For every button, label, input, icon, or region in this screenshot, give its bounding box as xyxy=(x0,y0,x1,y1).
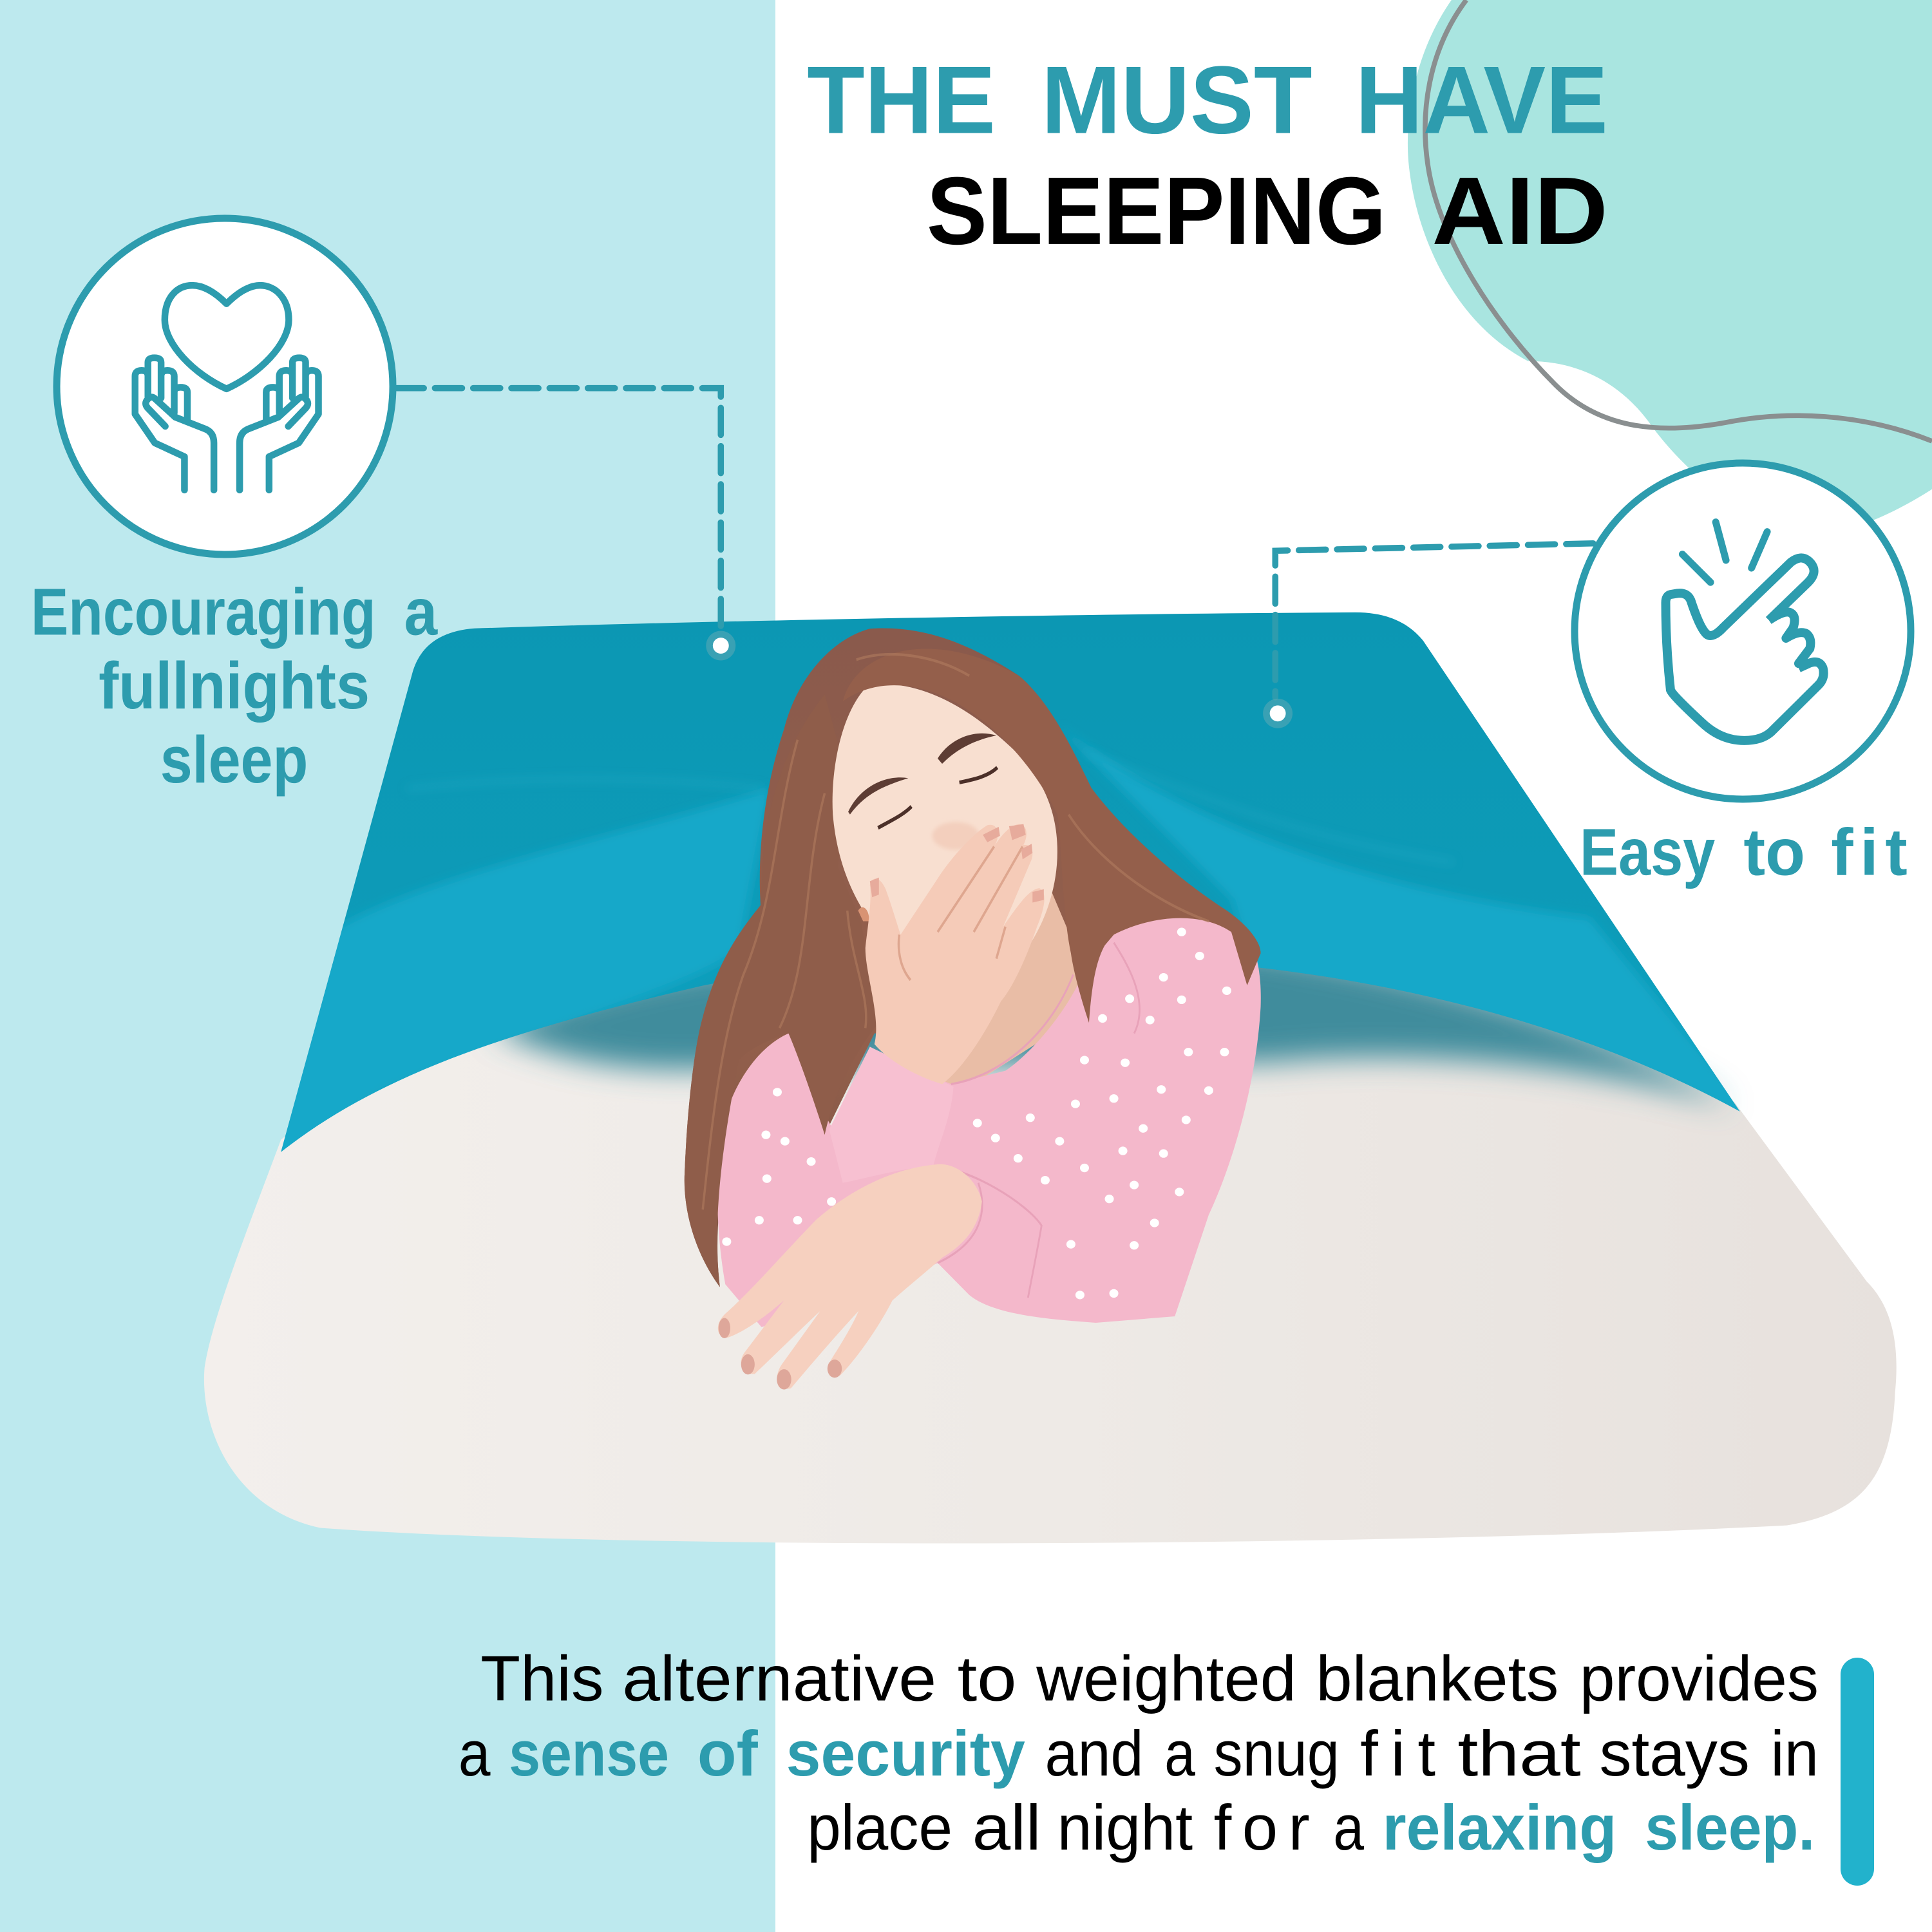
label: easy to fit xyxy=(1580,814,1908,889)
connector: left dashed line with dot xyxy=(397,388,735,661)
connector: right dashed line with dot xyxy=(1263,544,1593,728)
text block: description: alternative xyxy=(622,1643,936,1714)
hair strands xyxy=(703,654,1209,1209)
panel: left light blue background xyxy=(0,0,775,1932)
finger creases xyxy=(898,846,1023,980)
text block: description xyxy=(459,1643,1819,1864)
label: easy to fit: Easy xyxy=(1580,814,1715,889)
sheet folds xyxy=(265,727,1762,1171)
label: easy to fit: fit xyxy=(1831,814,1908,889)
label: encouraging a fullnights sleep: fullnights xyxy=(99,648,370,723)
text block: description: a xyxy=(1164,1718,1195,1790)
fingernail 3 xyxy=(777,1369,791,1390)
title: SLEEPING xyxy=(927,157,1386,265)
text block: description: This xyxy=(480,1643,604,1714)
title: MUST xyxy=(1041,46,1312,154)
text block: description: provides xyxy=(1580,1643,1819,1714)
label: encouraging a fullnights sleep: Encouraging xyxy=(31,574,376,649)
decorative blob: top right xyxy=(1408,0,1932,533)
text block: description: for xyxy=(1214,1792,1310,1864)
text block: description: in xyxy=(1770,1718,1819,1790)
title: HAVE xyxy=(1356,46,1608,154)
icon: finger snap xyxy=(1575,463,1911,799)
text block: description: all xyxy=(972,1792,1041,1864)
title: AID xyxy=(1432,157,1608,265)
decorative curve: grey line xyxy=(1425,0,1932,441)
accent bar xyxy=(1841,1658,1874,1886)
text block: description: and xyxy=(1045,1718,1144,1790)
text block: description: that xyxy=(1457,1718,1581,1790)
fingernail 1 xyxy=(719,1318,730,1338)
mattress with fitted sheet xyxy=(204,612,1897,1543)
label: encouraging a fullnights sleep: sleep xyxy=(160,722,308,797)
nose xyxy=(933,822,980,849)
closed eyes xyxy=(878,768,998,828)
label: encouraging a fullnights sleep xyxy=(31,574,439,797)
sleeve and seams xyxy=(829,1046,954,1183)
pink pyjama top xyxy=(717,914,1261,1327)
fingernail 4 xyxy=(828,1359,842,1378)
mouth covering hand xyxy=(866,824,1045,1084)
hair back xyxy=(685,629,1261,1287)
mattress body xyxy=(204,945,1897,1543)
neck xyxy=(888,889,1084,1092)
hair left over shoulder xyxy=(685,694,879,1287)
text block: description: snug xyxy=(1214,1718,1340,1790)
text block: description: a xyxy=(459,1718,491,1790)
text block: description: security xyxy=(786,1718,1025,1790)
text block: description: night xyxy=(1057,1792,1193,1864)
title: THE xyxy=(807,46,996,154)
face xyxy=(833,683,1057,1007)
label: encouraging a fullnights sleep: a xyxy=(404,574,439,649)
text block: description: relaxing xyxy=(1383,1792,1616,1864)
white heart pattern on top xyxy=(722,928,1231,1299)
text block: description: weighted xyxy=(1036,1643,1296,1714)
text block: description: place xyxy=(807,1792,952,1864)
shadow below sheet xyxy=(493,949,1731,1106)
text block: description: sense xyxy=(509,1718,669,1790)
fingernails xyxy=(870,824,1044,903)
eyebrows xyxy=(848,734,996,815)
ear xyxy=(858,907,869,922)
text block: description: to xyxy=(958,1643,1016,1714)
fingernail 2 xyxy=(741,1354,755,1374)
lower hand on mattress xyxy=(718,1164,982,1388)
sheet xyxy=(281,612,1740,1152)
hair right side xyxy=(843,649,1261,1023)
text block: description: stays xyxy=(1599,1718,1750,1790)
icon: heart held by hands xyxy=(57,218,393,554)
photo: yawning woman xyxy=(685,629,1261,1390)
text block: description: of xyxy=(697,1718,759,1790)
label: easy to fit: to xyxy=(1743,814,1805,889)
text block: description: fit xyxy=(1360,1718,1435,1790)
text block: description: sleep. xyxy=(1645,1792,1815,1864)
text block: description: a xyxy=(1333,1792,1365,1864)
title xyxy=(807,46,1608,265)
text block: description: blankets xyxy=(1316,1643,1558,1714)
